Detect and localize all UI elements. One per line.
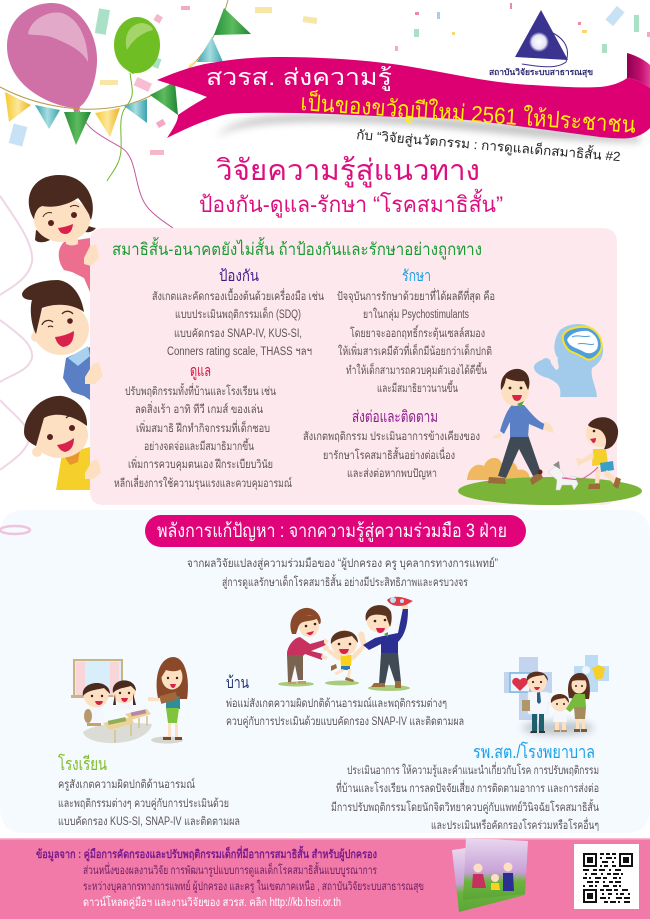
- mother: [287, 637, 326, 660]
- prevention block: แบบประเมินพฤติกรรมเด็ก (SDQ): [175, 306, 301, 321]
- referral block: [303, 409, 480, 480]
- boy: [340, 655, 352, 666]
- ribbon line: สวรส. ส่งความรู้: สวรส. ส่งความรู้: [206, 64, 392, 91]
- title: ป้องกัน-ดูแล-รักษา “โรคสมาธิสั้น”: [199, 189, 503, 218]
- source text: ระหว่างบุคลากรทางการแพทย์ ผู้ปกครอง และครู ในเขตภาคเหนือ , สถาบันวิจัยระบบสาธารณสุข: [83, 879, 424, 893]
- label: home block: บ้าน: [226, 674, 249, 692]
- label: school block: แบบคัดกรอง KUS-SI, SNAP-IV และติดตามผล: [58, 815, 240, 828]
- father: [363, 608, 408, 654]
- girl peeking: [29, 175, 99, 292]
- prevention block: Conners rating scale, THASS ฯลฯ: [167, 346, 312, 358]
- prevention block: [152, 268, 324, 358]
- label: school block: และพฤติกรรมต่างๆ ควบคู่กับการประเมินด้วย: [58, 797, 229, 810]
- label: school block: [58, 753, 240, 828]
- logo: สถาบันวิจัยระบบสาธารณสุข: สถาบันวิจัยระบบสาธารณสุข: [489, 67, 593, 78]
- handbook cover: [452, 838, 528, 912]
- title: วิจัยความรู้สู่แนวทาง: [216, 155, 480, 188]
- father peeking: [22, 280, 103, 400]
- mother: [568, 673, 590, 699]
- label: home block: ควบคู่กับการประเมินด้วยแบบคัดกรอง SNAP-IV และติดตามผล: [226, 715, 464, 728]
- toy plane: [387, 597, 413, 606]
- balloon strings: [78, 108, 174, 229]
- ground: [458, 477, 642, 505]
- ribbon banner: [157, 53, 650, 142]
- section intro: สู่การดูแลรักษาเด็กโรคสมาธิสั้น อย่างมีประสิทธิภาพและครบวงจร: [222, 574, 468, 589]
- student left: [86, 707, 105, 721]
- treatment block: ยาในกลุ่ม Psychostimulants: [363, 308, 469, 321]
- care block: ลดสิ่งเร้า อาทิ ทีวี เกมส์ ของเล่น: [135, 401, 263, 416]
- boy peeking: [24, 396, 101, 490]
- treatment block: ปัจจุบันการรักษาด้วยยาที่ได้ผลดีที่สุด คือ: [337, 288, 495, 303]
- footer band: [0, 838, 650, 919]
- label: school block: โรงเรียน: [58, 753, 107, 774]
- care block: เพิ่มสมาธิ ฝึกทำกิจกรรมที่เด็กชอบ: [136, 420, 270, 435]
- care block: ดูแล: [190, 363, 211, 381]
- source text: ดาวน์โหลดคู่มือฯ และงานวิจัยของ สวรส. คลิก http://kb.hsri.or.th: [83, 895, 341, 909]
- care block: หลีกเลี่ยงการใช้ความรุนแรงและควบคุมอารมณ์: [114, 475, 292, 490]
- illustration: family at home: [278, 597, 413, 691]
- source text: [36, 845, 424, 909]
- shadows: [83, 723, 152, 743]
- treatment block: และมีสมาธิยาวนานขึ้น: [377, 380, 458, 395]
- prevention block: แบบคัดกรอง SNAP-IV, KUS-SI,: [174, 328, 302, 340]
- treatment block: ทำให้เด็กสามารถควบคุมตัวเองได้ดีขึ้น: [346, 362, 487, 377]
- source text: ส่วนหนึ่งของผลงานวิจัย การพัฒนารูปแบบการดูแลเด็กโรคสมาธิสั้นแบบบูรณาการ: [83, 862, 377, 877]
- label: home block: พ่อแม่สังเกตความผิดปกติด้านอารมณ์และพฤติกรรมต่างๆ: [226, 696, 447, 710]
- pink ring: [0, 526, 30, 534]
- title: [199, 155, 503, 218]
- shadow: [522, 721, 594, 735]
- logo: สถาบันวิจัยระบบสาธารณสุข: [489, 10, 593, 78]
- desks: [103, 717, 134, 730]
- prevention block: สังเกตและคัดกรองเบื้องต้นด้วยเครื่องมือ เช่น: [152, 288, 324, 303]
- section intro: จากผลวิจัยแปลงสู่ความร่วมมือของ “ผู้ปกครอง ครู บุคลากรทางการแพทย์”: [187, 556, 498, 570]
- referral block: และส่งต่อหากพบปัญหา: [347, 468, 437, 480]
- illustration: father, child and dog walking: [458, 369, 642, 505]
- source text: ข้อมูลจาก : คู่มือการคัดกรองและปรับพฤติกรรมเด็กที่มีอาการสมาธิสั้น สำหรับผู้ปกครอง: [36, 845, 377, 862]
- referral block: สังเกตพฤติกรรม ประเมินอาการข้างเคียงของ: [303, 430, 480, 443]
- father: [498, 435, 541, 478]
- care block: ปรับพฤติกรรมทั้งที่บ้านและโรงเรียน เช่น: [125, 383, 276, 398]
- window: [74, 660, 122, 696]
- panel heading: สมาธิสั้น-อนาคตยังไม่สั้น ถ้าป้องกันและรักษาอย่างถูกทาง: [112, 237, 482, 260]
- pink balloon: [7, 3, 97, 108]
- treatment block: [337, 268, 495, 395]
- decorative wavy lines: [0, 196, 32, 470]
- child: [592, 449, 608, 466]
- subtitle: กับ วิจัยสู่นวัตกรรม: กับ “วิจัยสู่นวัตกรรม : การดูแลเด็กสมาธิสั้น #2: [356, 125, 621, 165]
- panel: knowledge to guidelines: [90, 228, 617, 505]
- illustration: teacher and students at school: [71, 657, 188, 744]
- referral block: ยารักษาโรคสมาธิสั้นอย่างต่อเนื่อง: [323, 447, 455, 462]
- panel: three-party cooperation: [0, 510, 650, 833]
- illustration: family peeking behind panel: [22, 175, 103, 490]
- label: school block: ครูสังเกตความผิดปกติด้านอารมณ์: [58, 777, 195, 791]
- care block: เพิ่มการควบคุมตนเอง ฝึกระเบียบวินัย: [128, 456, 273, 471]
- treatment block: โดยยาจะออกฤทธิ์กระตุ้นเซลล์สมอง: [350, 324, 485, 340]
- green balloon: [114, 17, 160, 73]
- doctor: [528, 692, 553, 714]
- care block: อย่างจดจ่อและมีสมาธิมากขึ้น: [144, 438, 254, 453]
- section intro: [187, 556, 498, 589]
- bush: [467, 458, 530, 480]
- prevention block: ป้องกัน: [219, 268, 259, 285]
- bunting: [0, 0, 251, 145]
- teacher: [157, 657, 188, 699]
- crosses: [504, 657, 552, 720]
- treatment block: รักษา: [402, 268, 431, 285]
- label: home block: [226, 674, 464, 728]
- care block: [114, 363, 292, 490]
- dog: [548, 466, 578, 490]
- label: hospital block: และประเมินหรือคัดกรองโรคร่วมหรือโรคอื่นๆ: [431, 817, 599, 832]
- balloons: [7, 3, 174, 229]
- child: [553, 712, 567, 722]
- confetti: [9, 3, 650, 155]
- ribbon shadow: [215, 114, 640, 142]
- student right: [116, 703, 133, 710]
- ribbon fold: [627, 53, 650, 88]
- ground shadows: [278, 682, 314, 686]
- section heading pill: พลังการแก้ปัญหา : จากความรู้สู่ความร่วมมือ 3 ฝ่าย: [157, 521, 507, 542]
- label: hospital block: รพ.สต./โรงพยาบาล: [473, 741, 595, 762]
- QR code: [574, 844, 639, 909]
- label: hospital block: [331, 741, 599, 832]
- section heading pill: [145, 515, 526, 547]
- ribbon body: [157, 57, 650, 138]
- referral block: ส่งต่อและติดตาม: [352, 409, 438, 426]
- illustration: medical team: [504, 655, 609, 735]
- illustration: child silhouette with brain: [534, 324, 603, 397]
- treatment block: ให้เพิ่มสารเคมีตัวที่เด็กมีน้อยกว่าเด็กปกติ: [338, 343, 492, 358]
